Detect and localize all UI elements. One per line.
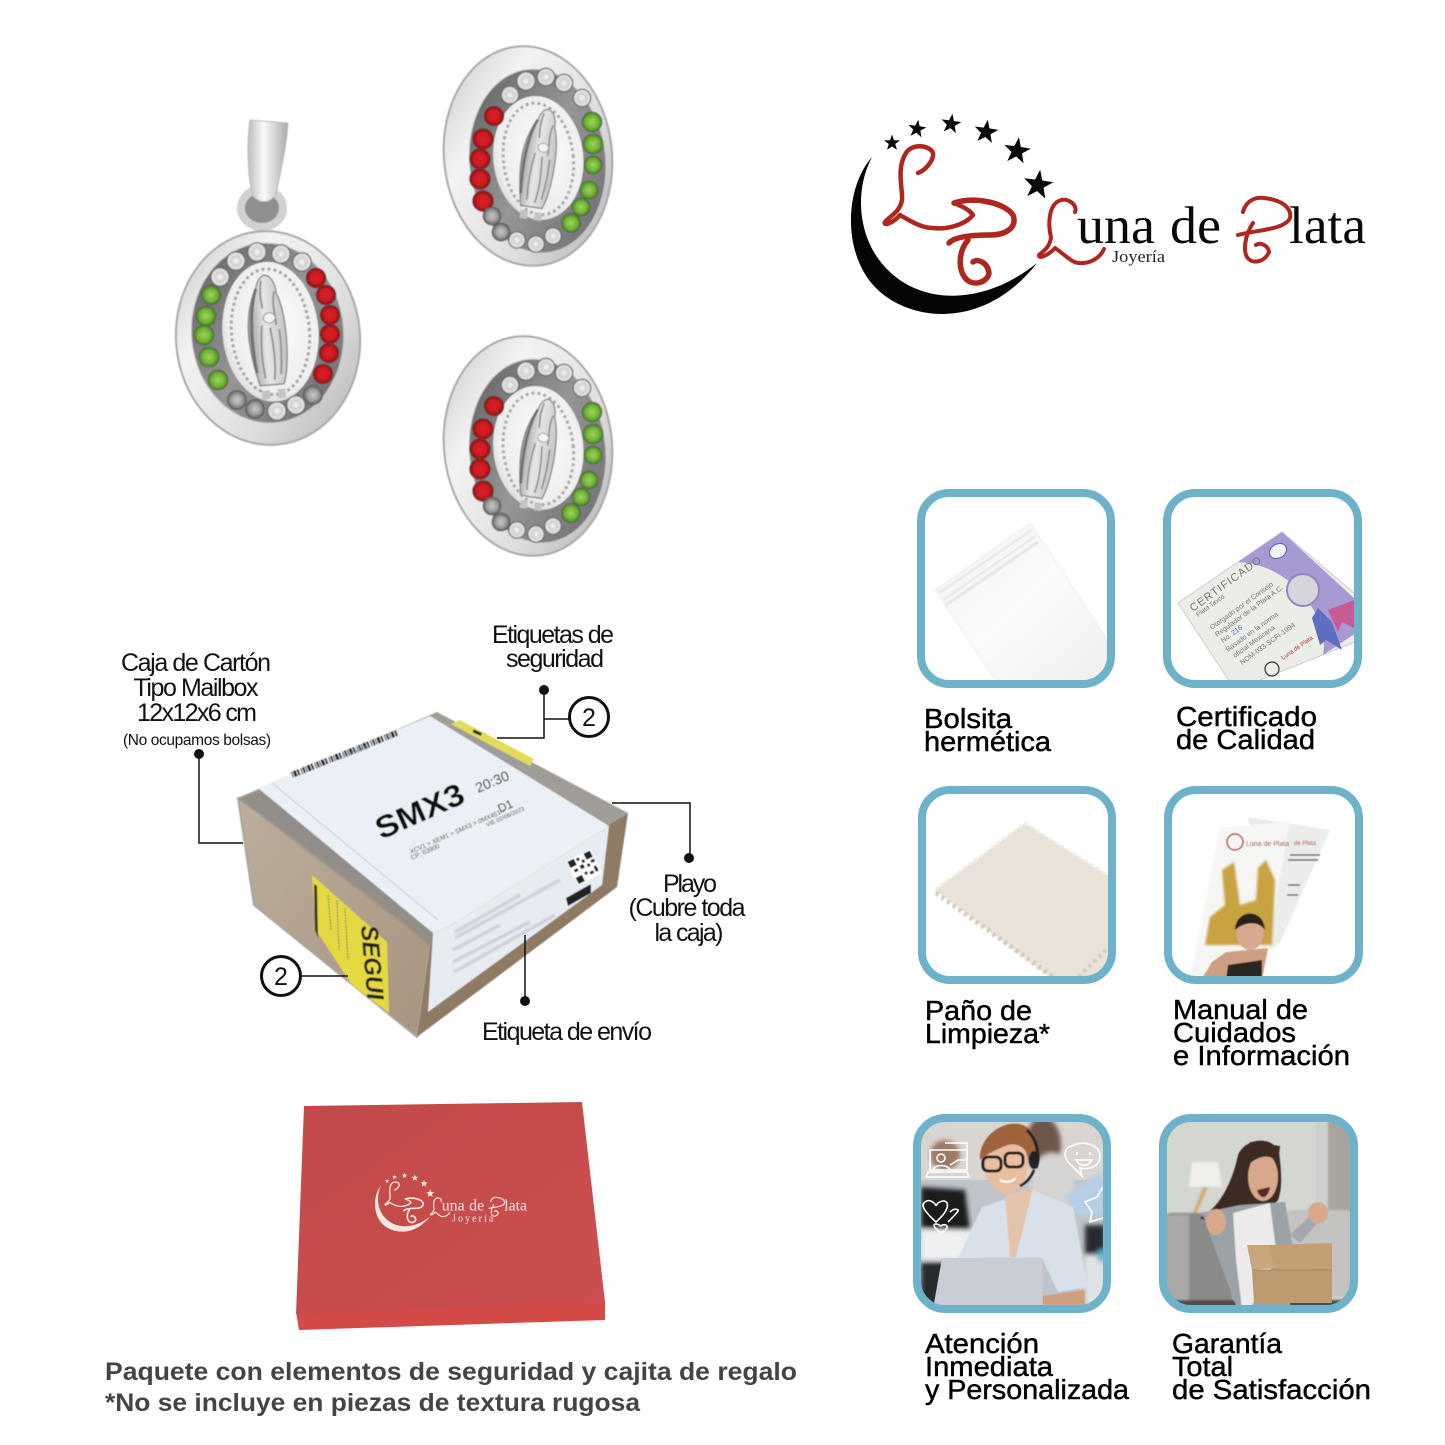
gift box logo: de <box>469 1198 484 1215</box>
card label: hermética <box>924 726 1051 757</box>
sofa <box>1163 1210 1354 1309</box>
QR tag <box>566 884 591 906</box>
callout leader <box>199 754 243 843</box>
laptop <box>933 1258 1043 1309</box>
earring bottom <box>433 328 623 564</box>
card label: Garantía <box>1172 1328 1282 1359</box>
gift box logo <box>375 1173 527 1232</box>
shipping box: CP: 63900 <box>410 843 441 862</box>
card label <box>1172 1328 1371 1405</box>
certificate image: oficial Mexicana <box>1232 625 1277 660</box>
QR code <box>566 849 602 885</box>
card label <box>925 995 1050 1049</box>
security seal side <box>312 875 389 1013</box>
gift box logo: Joyería <box>452 1214 494 1225</box>
gift box logo: una <box>442 1198 465 1215</box>
card label: Atención <box>925 1328 1039 1359</box>
panel: certificado de calidad <box>1167 493 1360 755</box>
callout text: Playo <box>663 870 717 898</box>
callout text: Tipo Mailbox <box>134 674 259 702</box>
certificate image: CERTIFICADO <box>1188 554 1265 614</box>
card frame <box>1168 790 1359 980</box>
earring top <box>433 38 623 274</box>
route code SMX3: SMX3 <box>370 776 470 846</box>
blurred address <box>453 880 560 972</box>
callout text <box>492 621 614 673</box>
pendant <box>167 120 369 453</box>
callout: etiqueta de envio <box>482 935 652 1046</box>
card label <box>1176 701 1317 755</box>
earring stones <box>470 68 603 252</box>
card label: Limpieza* <box>925 1018 1050 1049</box>
cardboard box <box>1247 1243 1332 1303</box>
logo wordmark: de <box>1170 197 1221 255</box>
shipping box: VIE 02/06/2023 <box>485 806 526 829</box>
callout text: Etiquetas de <box>492 621 614 649</box>
support agent photo <box>917 1117 1107 1309</box>
callout text: (Cubre toda <box>628 894 746 922</box>
shipping box: 923000368601 <box>339 744 372 762</box>
cloth image <box>935 823 1112 985</box>
certificate image: Luna de Plata <box>1281 635 1315 662</box>
footer note: Paquete con elementos de seguridad y cajita de regalo <box>105 1358 797 1386</box>
callout text: Caja de Cartón <box>121 649 271 677</box>
card frame <box>1163 1118 1354 1309</box>
red gift box <box>296 1102 605 1330</box>
card label: de Calidad <box>1176 724 1315 755</box>
panel: garantia total <box>1163 1118 1371 1405</box>
callout text: seguridad <box>506 645 604 673</box>
callout text <box>628 870 746 947</box>
card label: Total <box>1172 1351 1233 1382</box>
bag image <box>935 523 1108 684</box>
card label <box>924 703 1051 757</box>
callout: side seal count: 2 <box>274 963 288 991</box>
logo crescent moon <box>851 157 1037 314</box>
certificate image: Plata Taxco <box>1195 593 1227 619</box>
callout leader <box>612 803 690 858</box>
card label: Cuidados <box>1173 1017 1296 1048</box>
certificate image: Basado en la norma <box>1225 611 1280 654</box>
box left face <box>238 798 432 1037</box>
card label: Bolsita <box>924 703 1012 734</box>
pendant bail <box>248 120 288 202</box>
logo: Luna de Plata <box>851 112 1366 314</box>
callout: side seal count <box>262 956 348 996</box>
panel: atencion inmediata <box>917 1117 1129 1405</box>
logo subtitle: Joyería <box>1112 247 1165 266</box>
logo red swirl letters <box>885 146 1290 283</box>
card label: Certificado <box>1176 701 1317 732</box>
callout text <box>121 649 271 749</box>
route details: XCV1 > XEM1 > SMX3 > 0MX451 > <box>409 807 507 856</box>
certificate image: Otorgado por el Consejo <box>1209 581 1275 632</box>
card frame <box>921 493 1111 684</box>
panel: pano de limpieza <box>922 790 1112 1049</box>
panel: manual de cuidados <box>1168 790 1359 1071</box>
brochure image <box>1190 817 1330 980</box>
floating support icons <box>923 1143 1103 1233</box>
gift box logo: lata <box>504 1198 527 1215</box>
logo stars <box>884 112 1055 199</box>
callout: etiqueta de envio: Etiqueta de envío <box>482 1018 652 1046</box>
brochure image: Luna de Plata <box>1246 841 1289 848</box>
pendant ring <box>241 189 283 227</box>
card label: Manual de <box>1173 994 1308 1025</box>
pendant body <box>167 223 369 453</box>
card label: e Información <box>1173 1040 1350 1071</box>
callout: etiquetas de seguridad <box>492 621 614 738</box>
callout text: 12x12x6 cm <box>137 699 257 727</box>
card label: y Personalizada <box>925 1374 1129 1405</box>
gift box side <box>296 1300 605 1330</box>
lamp <box>1189 1162 1222 1215</box>
card label: Inmediata <box>925 1351 1053 1382</box>
callout text: la caja) <box>654 919 724 947</box>
footer note: *No se incluye en piezas de textura rugosa <box>105 1389 641 1417</box>
card frame <box>1167 493 1358 684</box>
card frame <box>922 790 1112 980</box>
callout leader <box>497 690 570 738</box>
callout text: (No ocupamos bolsas) <box>123 732 271 749</box>
box white label <box>258 716 609 1012</box>
brochure image: de Plata <box>1294 841 1317 847</box>
box right face <box>417 813 628 1037</box>
box top plastic <box>238 712 628 933</box>
security seal top <box>451 720 534 766</box>
earring stones bottom <box>470 358 603 542</box>
barcode <box>292 733 397 775</box>
certificate image: NOM-033-SCFI-1994 <box>1239 622 1297 667</box>
callout: caja de carton <box>121 649 271 843</box>
panel: bolsita hermetica <box>921 493 1111 757</box>
pendant stones <box>194 242 340 420</box>
certificate image: No. 216 <box>1220 624 1244 645</box>
shipping box: D1 <box>496 797 516 816</box>
card label: Paño de <box>925 995 1032 1026</box>
logo wordmark <box>1077 197 1366 255</box>
security seal side: SEGUI <box>355 924 389 1002</box>
logo wordmark: lata <box>1289 197 1366 255</box>
shipping box <box>238 712 628 1037</box>
card label: de Satisfacción <box>1172 1374 1371 1405</box>
logo wordmark: una <box>1077 197 1155 255</box>
agent figure <box>958 1124 1088 1305</box>
certificate image <box>1178 532 1360 690</box>
card label <box>1173 994 1350 1071</box>
route time: 20:30 <box>473 767 512 796</box>
certificate image: Regulador de la Plata A.C. <box>1214 584 1285 639</box>
callout: playo <box>612 803 746 947</box>
card label <box>925 1328 1129 1405</box>
footer note <box>105 1358 797 1417</box>
count badge: 2 <box>582 704 596 732</box>
customer figure <box>1200 1141 1328 1309</box>
happy customer photo <box>1163 1118 1354 1309</box>
card frame <box>917 1118 1107 1309</box>
gift box lid <box>296 1102 605 1314</box>
